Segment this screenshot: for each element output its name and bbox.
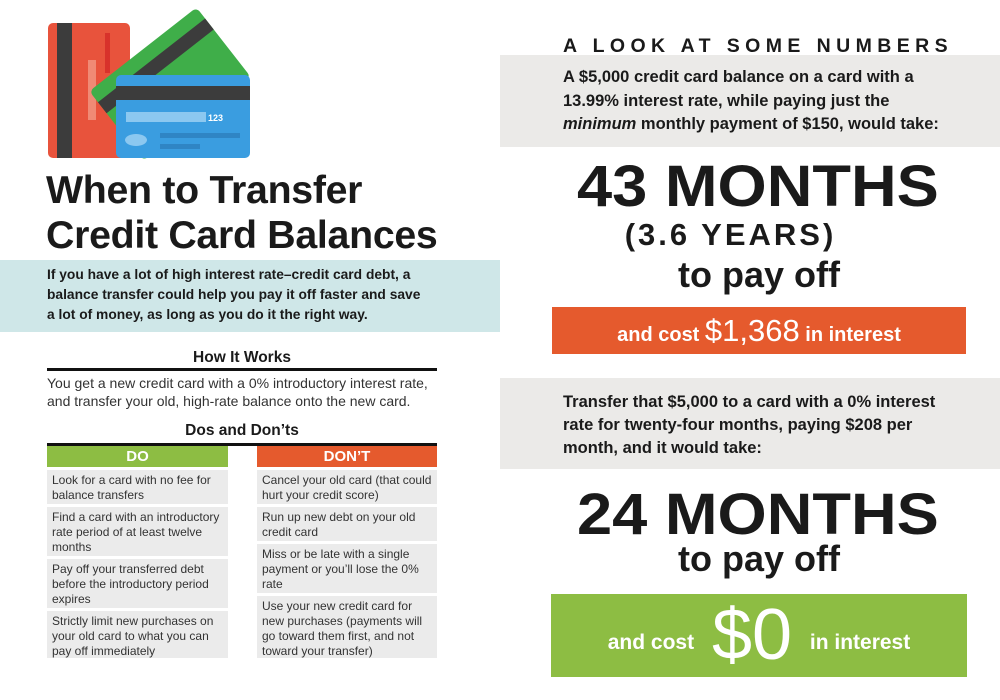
- text: how it works: and transfer your old, high-rate balance onto the new card.: [47, 393, 410, 409]
- text: scenario 2: month, and it would take:: [563, 439, 762, 457]
- heading: dos and don'ts: [47, 422, 437, 446]
- panel: do: Look for a card with no fee for balance transfers: [52, 473, 211, 502]
- icon: credit cards: 123: [208, 113, 223, 123]
- stat: 43 months: 43 MONTHS: [577, 154, 939, 219]
- text: scenario 2: Transfer that $5,000 to a card with a 0% interest: [563, 393, 935, 411]
- panel: don't: Run up new debt on your old credit card: [262, 510, 415, 539]
- callout: cost 1368: and cost $1,368 in interest: [617, 313, 901, 348]
- stat: 3.6 years: (3.6 YEARS): [625, 217, 836, 252]
- header: don't: DON’T: [324, 448, 370, 465]
- panel: do: [47, 446, 228, 658]
- text: how it works: You get a new credit card with a 0% introductory interest rate,: [47, 375, 428, 391]
- panel: don't: Miss or be late with a single payment or you’ll lose the 0% rate: [262, 547, 419, 591]
- stat: 24 months: 24 MONTHS: [577, 482, 939, 547]
- text: to pay off: to pay off: [678, 254, 840, 295]
- header: don't: [257, 446, 437, 467]
- panel: don't: [257, 446, 437, 658]
- callout: cost 1368: [552, 307, 966, 354]
- title: Credit Card Balances: [46, 213, 437, 257]
- heading: a look at some numbers: A LOOK AT SOME NUMBERS: [563, 35, 953, 57]
- panel: don't: Use your new credit card for new purchases (payments will go toward them first, and not toward your transfer): [262, 599, 422, 658]
- text: scenario 1: A $5,000 credit card balance on a card with a: [563, 68, 914, 86]
- gray box 2: [500, 378, 1000, 469]
- icon: credit cards: [48, 10, 250, 158]
- text: to pay off 2: to pay off: [678, 538, 840, 579]
- gray box 1: [500, 55, 1000, 147]
- panel: do: Strictly limit new purchases on your old card to what you can pay off immediately: [52, 614, 213, 658]
- header: do: DO: [126, 448, 149, 465]
- panel: do: Pay off your transferred debt before the introductory period expires: [52, 562, 209, 606]
- title: [46, 168, 437, 257]
- text: how it works: [47, 375, 428, 409]
- text: scenario 2: rate for twenty-four months, paying $208 per: [563, 416, 912, 434]
- text: scenario 1: [563, 68, 939, 133]
- panel: do: Find a card with an introductory rate period of at least twelve months: [52, 510, 219, 554]
- text: scenario 1: 13.99% interest rate, while paying just the: [563, 92, 889, 110]
- title: When to Transfer: [46, 168, 362, 212]
- callout: cost 0: and cost $0 in interest: [608, 595, 910, 675]
- intro band: If you have a lot of high interest rate–credit card debt, a: [47, 267, 410, 282]
- text: scenario 1: minimum monthly payment of $150, would take:: [563, 115, 939, 133]
- intro band: balance transfer could help you pay it off faster and save: [47, 287, 420, 302]
- header: do: [47, 446, 228, 467]
- text: scenario 2: [563, 393, 936, 457]
- heading: how it works: How It Works: [193, 349, 291, 366]
- panel: don't: Cancel your old card (that could hurt your credit score): [262, 473, 431, 502]
- intro band: [0, 260, 500, 332]
- intro band: a lot of money, as long as you do it the right way.: [47, 307, 368, 322]
- heading: dos and don'ts: Dos and Don’ts: [185, 422, 299, 439]
- heading: how it works: [47, 349, 437, 371]
